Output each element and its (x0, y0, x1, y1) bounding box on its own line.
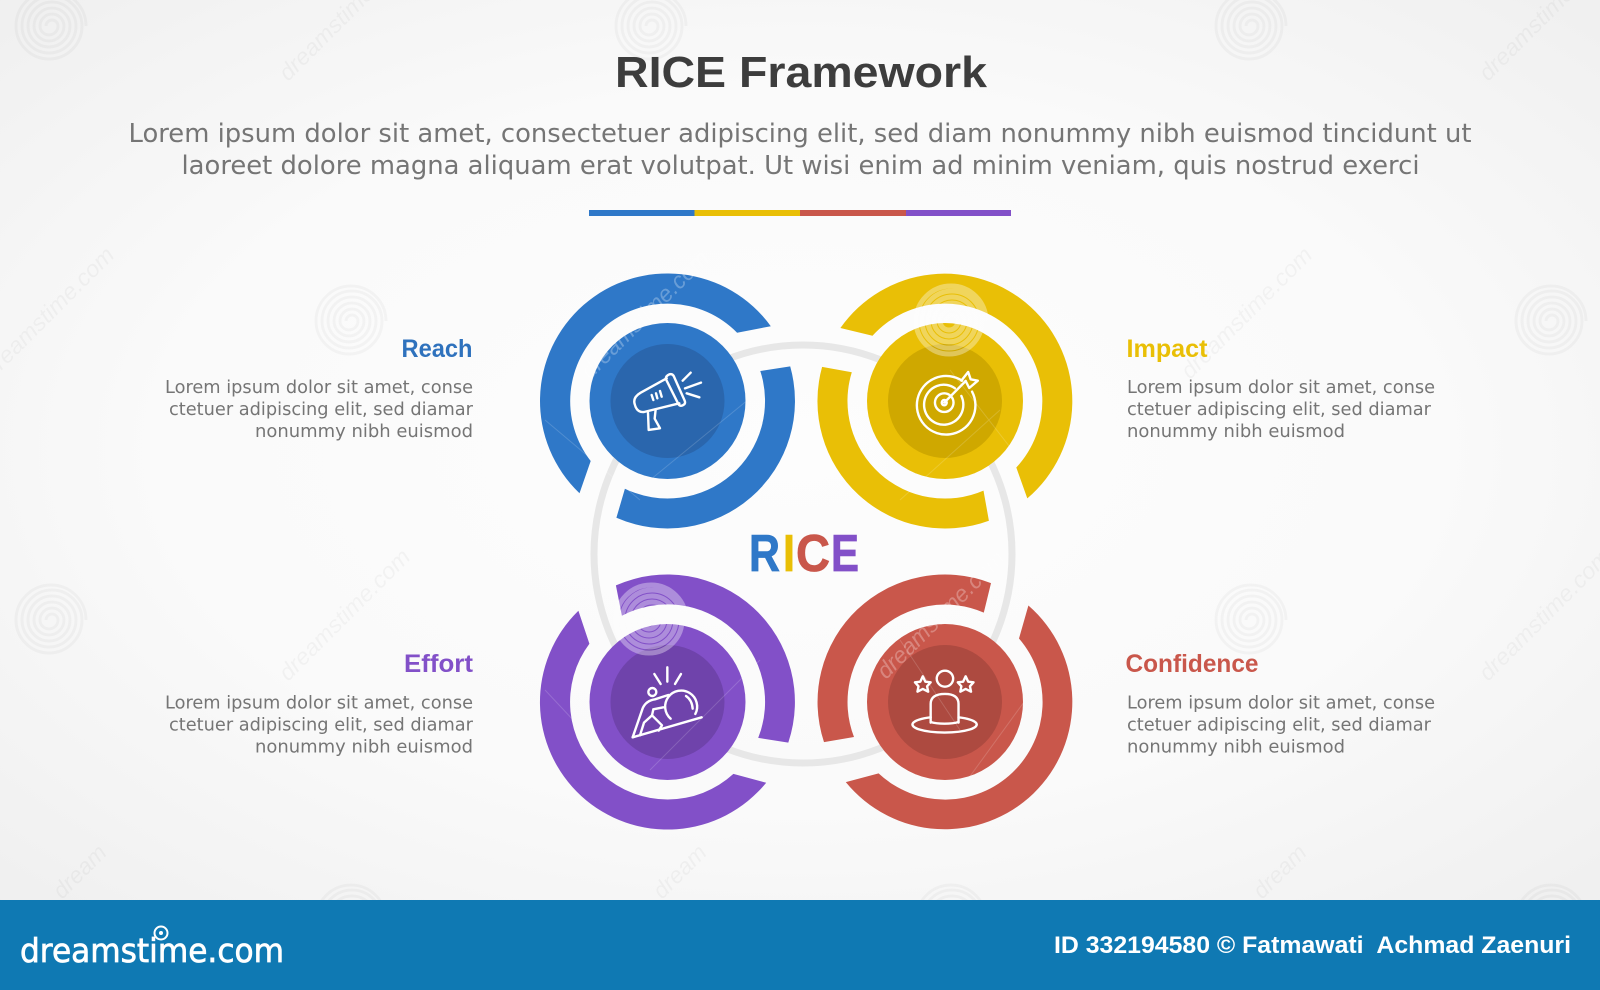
label block: Effort (165, 650, 474, 758)
watermarks over circles: dreamstime.com (575, 245, 714, 384)
label block: Confidence: nonummy nibh euismod (1127, 736, 1345, 758)
label block: Effort: nonummy nibh euismod (255, 736, 473, 758)
colored divider bar (589, 210, 1011, 216)
label block: Reach: nonummy nibh euismod (255, 421, 473, 442)
circle: Effort (540, 575, 795, 830)
subtitle text: laoreet dolore magna aliquam erat volutpat. Ut wisi enim ad minim veniam, quis nostrud exerci (182, 151, 1420, 181)
subtitle text (128, 119, 1472, 181)
label block: Effort: Lorem ipsum dolor sit amet, conse (165, 692, 473, 714)
footer credit: ID 332194580 © Fatmawati Achmad Zaenuri (1054, 932, 1571, 959)
central grey ring (594, 345, 1012, 763)
center label RICE: I (783, 525, 795, 583)
center label RICE (749, 525, 859, 583)
label block: Confidence: Confidence (1126, 650, 1259, 678)
label block: Impact: nonummy nibh euismod (1127, 421, 1345, 442)
background watermark text: dream (47, 839, 112, 904)
center label RICE: C (796, 525, 830, 583)
background watermark text: dream (647, 839, 712, 904)
center label RICE: R (749, 525, 780, 583)
watermarks over circles (545, 245, 1040, 790)
label block: Confidence: Lorem ipsum dolor sit amet, conse (1127, 692, 1435, 714)
circle: Confidence (818, 575, 1072, 829)
title: RICE Framework (615, 48, 988, 97)
icon: person pushing boulder (633, 667, 702, 737)
circle: Reach (540, 273, 795, 528)
label block: Impact: Lorem ipsum dolor sit amet, conse (1127, 377, 1435, 398)
label block: Effort: ctetuer adipiscing elit, sed diamar (169, 714, 474, 736)
background watermark text: dreamstime.com (1175, 241, 1317, 384)
footer band (0, 900, 1600, 990)
label block: Impact: ctetuer adipiscing elit, sed diamar (1127, 399, 1432, 420)
label block: Confidence: ctetuer adipiscing elit, sed diamar (1127, 714, 1432, 736)
label block: Impact (1126, 335, 1435, 442)
icon: target with arrow (917, 372, 978, 435)
background watermark text: dream (1247, 839, 1312, 904)
watermarks over circles: dreamstime.com (871, 545, 1010, 684)
icon: megaphone (634, 373, 701, 430)
icon: person with stars (912, 671, 977, 733)
center label RICE: E (831, 525, 859, 583)
label block: Reach (165, 335, 474, 442)
label block: Effort: Effort (404, 650, 474, 678)
label block: Reach: Reach (402, 335, 472, 363)
footer logo: dreamstime.com (20, 931, 284, 970)
label block: Reach: Lorem ipsum dolor sit amet, conse (165, 377, 473, 398)
circle: Impact (817, 274, 1072, 529)
label block: Impact: Impact (1126, 335, 1208, 363)
label block: Confidence (1126, 650, 1435, 758)
subtitle text: Lorem ipsum dolor sit amet, consectetuer adipiscing elit, sed diam nonummy nibh euismod tincidunt ut (128, 119, 1472, 149)
label block: Reach: ctetuer adipiscing elit, sed diamar (169, 399, 474, 420)
background watermark text: dreamstime.com (273, 543, 415, 686)
